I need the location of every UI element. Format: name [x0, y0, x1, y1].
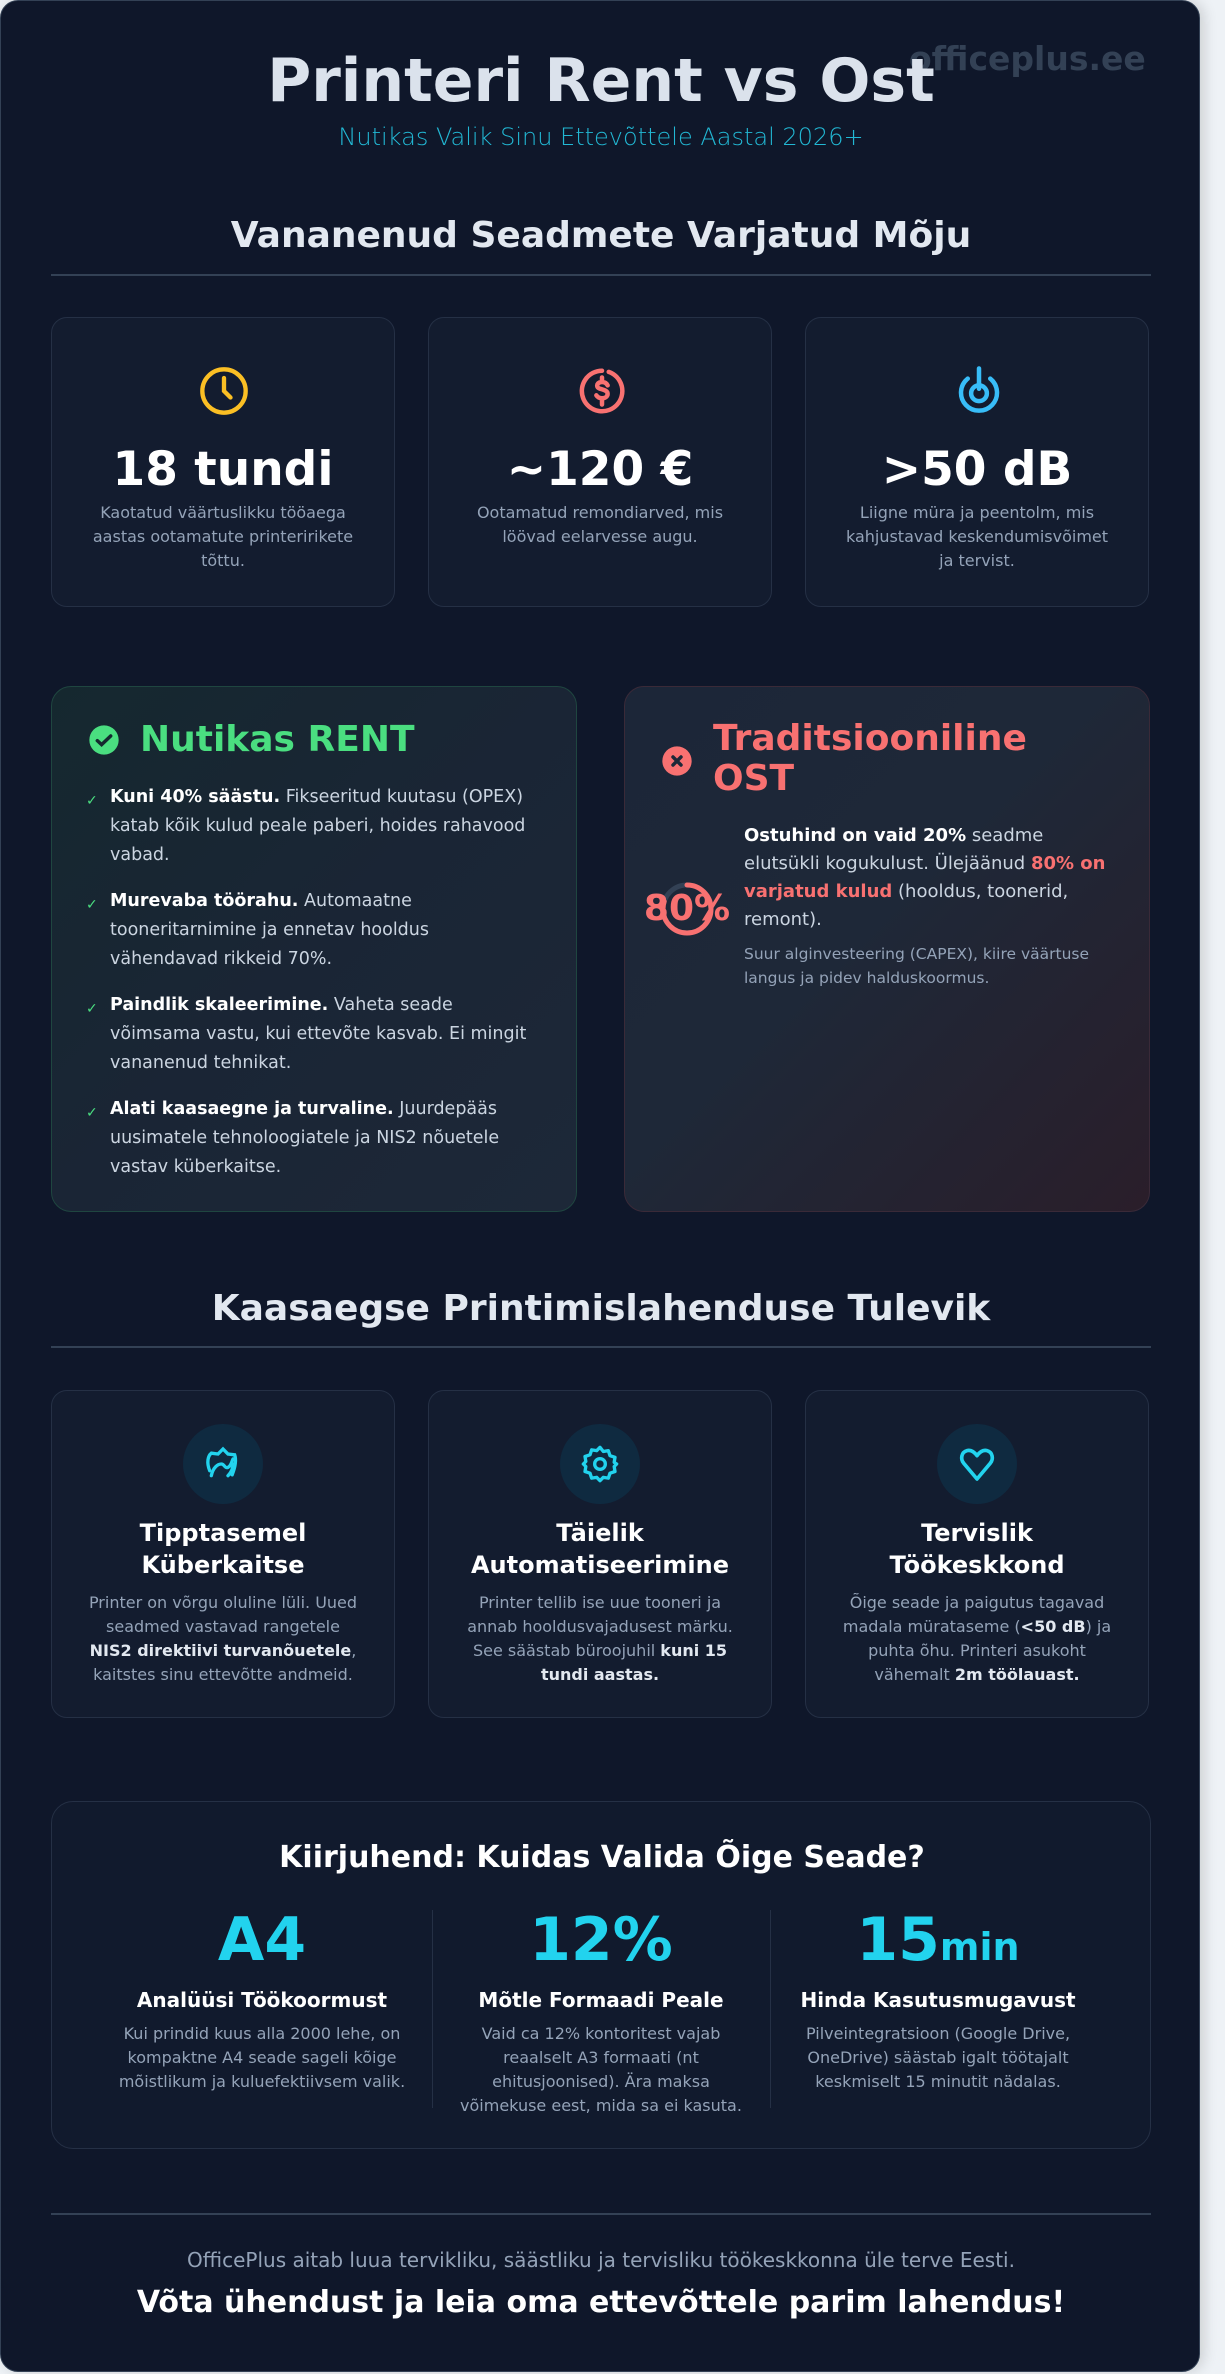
watermark: officeplus.ee — [909, 39, 1146, 78]
feature description: Printer tellib ise uue tooneri ja annab hooldusvajadusest märku. See säästab büroojuhil kuni 15 tundi aastas. — [467, 1593, 733, 1684]
stat description: Ootamatud remondiarved, mis löövad eelarvesse augu. — [477, 503, 723, 546]
icon: clock — [200, 367, 248, 415]
feature title — [140, 1519, 306, 1579]
panel: traditional purchase — [624, 686, 1150, 1212]
guide heading: Kiirjuhend: Kuidas Valida Õige Seade? — [279, 1840, 925, 1875]
feature title: Küberkaitse — [142, 1551, 304, 1579]
feature title: Töökeskkond — [889, 1551, 1064, 1579]
heading: future: Kaasaegse Printimislahenduse Tulevik — [212, 1288, 990, 1329]
guide column: 15min: 15min — [856, 1905, 1020, 1975]
panel: feature cards — [51, 1390, 1149, 1718]
panel: smart rent — [51, 686, 577, 1212]
stat card: cost — [428, 317, 772, 607]
feature description: Õige seade ja paigutus tagavad madala mürataseme (<50 dB) ja puhta õhu. Printeri asukoht vähemalt 2m töölauast. — [843, 1593, 1111, 1684]
guide column: 12%: Vaid ca 12% kontoritest vajab reaalselt A3 formaati (nt ehitusjoonised). Ära maksa võimekuse eest, mida sa ei kasuta. — [460, 2024, 742, 2115]
feature title — [889, 1519, 1064, 1579]
stat value: 18 tundi — [113, 442, 333, 497]
guide column: 15min: Pilveintegratsioon (Google Drive, OneDrive) säästab igalt töötajalt keskmiselt 15 minutit nädalas. — [806, 2024, 1070, 2091]
icon: heart — [937, 1424, 1017, 1504]
guide column: A4 — [119, 1905, 405, 2091]
stat description: Kaotatud väärtuslikku tööaega aastas ootamatute printeririkete tõttu. — [93, 503, 353, 570]
stat description: Liigne müra ja peentolm, mis kahjustavad keskendumisvõimet ja tervist. — [846, 503, 1108, 570]
icon: money — [580, 368, 625, 414]
heading: Traditsiooniline OST: Traditsiooniline — [713, 718, 1027, 759]
icon: power — [958, 366, 1000, 413]
bullet: worry-free: Murevaba töörahu. Automaatne tooneritarnimine ja ennetav hooldus vähendavad rikkeid 70%. — [110, 891, 429, 969]
heading: Nutikas RENT: Nutikas RENT — [140, 719, 414, 760]
stat value: ~120 € — [507, 442, 693, 497]
feature title: Tervislik — [921, 1519, 1033, 1547]
feature: cybersecurity — [51, 1390, 395, 1718]
text: capex note: Suur alginvesteering (CAPEX), kiire väärtuse langus ja pidev halduskoormus. — [744, 945, 1089, 987]
stat card: noise — [805, 317, 1149, 607]
feature: automation — [428, 1390, 772, 1718]
icon: check circle — [89, 725, 119, 755]
guide column: 12% — [460, 1905, 742, 2115]
icon: gear — [560, 1424, 640, 1504]
guide column: A4: Analüüsi Töökoormust — [137, 1988, 387, 2012]
feature: healthy workplace — [805, 1390, 1149, 1718]
panel: quick guide — [51, 1801, 1151, 2149]
heading: Traditsiooniline OST — [662, 718, 1027, 799]
panel: smart rent: ✓ — [86, 897, 98, 913]
stat value: >50 dB — [882, 442, 1072, 497]
bullet: security: Alati kaasaegne ja turvaline. Juurdepääs uusimatele tehnoloogiatele ja NIS2 nõuetele vastav küberkaitse. — [110, 1099, 499, 1177]
icon: x circle — [662, 746, 692, 776]
panel: stat cards — [51, 317, 1149, 607]
panel: smart rent: ✓ — [86, 1001, 98, 1017]
feature title: Automatiseerimine — [471, 1551, 729, 1579]
panel: smart rent: ✓ — [86, 793, 98, 809]
guide column: 15min — [800, 1905, 1076, 2091]
guide column: 15min: Hinda Kasutusmugavust — [800, 1988, 1076, 2012]
heading: Traditsiooniline OST: OST — [713, 758, 794, 799]
guide column: 12%: Mõtle Formaadi Peale — [478, 1988, 724, 2012]
stat card: time — [51, 317, 395, 607]
title: Printeri Rent vs Ost — [267, 46, 935, 116]
feature title — [471, 1519, 729, 1579]
chart: 80% ring: 80% — [644, 888, 730, 929]
guide column: A4: A4 — [218, 1905, 306, 1975]
guide column: 12%: 12% — [529, 1905, 673, 1975]
call to action: Võta ühendust ja leia oma ettevõttele parim lahendus! — [137, 2285, 1065, 2320]
panel: smart rent: ✓ — [86, 1105, 98, 1121]
bullet: savings: Kuni 40% säästu. Fikseeritud kuutasu (OPEX) katab kõik kulud peale paberi, hoides rahavood vabad. — [110, 787, 525, 865]
bullet: scaling: Paindlik skaleerimine. Vaheta seade võimsama vastu, kui ettevõte kasvab. Ei mingit vananenud tehnikat. — [110, 995, 526, 1073]
subtitle: Nutikas Valik Sinu Ettevõttele Aastal 2026+ — [338, 123, 864, 151]
heading: hidden impact: Vananenud Seadmete Varjatud Mõju — [231, 215, 971, 256]
footer text: OfficePlus aitab luua tervikliku, säästliku ja tervisliku töökeskkonna üle terve Eesti. — [187, 2248, 1015, 2272]
feature title: Tipptasemel — [140, 1519, 306, 1547]
feature title: Täielik — [556, 1519, 644, 1547]
icon: shield — [183, 1424, 263, 1504]
text: purchase cost: Ostuhind on vaid 20% seadme elutsükli kogukulust. Ülejäänud 80% on varjatud kulud (hooldus, toonerid, remont). — [744, 825, 1105, 930]
guide column: A4: Kui prindid kuus alla 2000 lehe, on kompaktne A4 seade sageli kõige mõistlikum ja kuluefektiivsem valik. — [119, 2024, 405, 2091]
feature description: Printer on võrgu oluline lüli. Uued seadmed vastavad rangetele NIS2 direktiivi turvanõuetele, kaitstes sinu ettevõtte andmeid. — [89, 1593, 357, 1684]
